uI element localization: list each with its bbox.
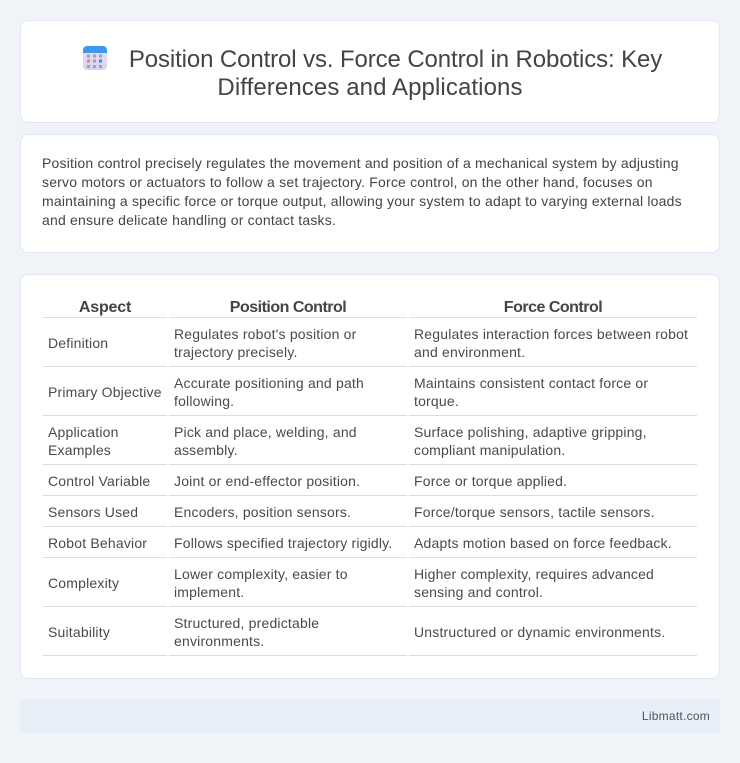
panel: intro text card bbox=[20, 134, 720, 253]
table header row: Aspect bbox=[79, 299, 131, 316]
row: Primary Objective: Accurate positioning and path bbox=[174, 375, 364, 391]
row: Definition: trajectory precisely. bbox=[174, 344, 298, 360]
row: Control Variable: Force or torque applied. bbox=[414, 473, 567, 489]
row: Sensors Used: Force/torque sensors, tactile sensors. bbox=[414, 504, 655, 520]
row: Sensors Used: Encoders, position sensors. bbox=[174, 504, 351, 520]
row: Application Examples bbox=[43, 424, 697, 465]
row: Application Examples: assembly. bbox=[174, 442, 238, 458]
row: Complexity: Complexity bbox=[48, 575, 119, 591]
intro paragraph: Position control precisely regulates the movement and position of a mechanical system by adjusting bbox=[42, 155, 679, 171]
row: Definition: Definition bbox=[48, 335, 108, 351]
row: Control Variable: Joint or end-effector position. bbox=[174, 473, 360, 489]
row: Complexity: Higher complexity, requires advanced bbox=[414, 566, 654, 582]
row: Robot Behavior: Follows specified trajectory rigidly. bbox=[174, 535, 392, 551]
row: Suitability: Structured, predictable bbox=[174, 615, 319, 631]
row: Robot Behavior bbox=[43, 535, 697, 558]
row: Primary Objective: Primary Objective bbox=[48, 384, 162, 400]
row: Suitability bbox=[43, 615, 697, 656]
row: Definition: and environment. bbox=[414, 344, 525, 360]
row: Robot Behavior: Adapts motion based on force feedback. bbox=[414, 535, 672, 551]
table header row: Force Control bbox=[504, 299, 602, 316]
row: Primary Objective: following. bbox=[174, 393, 234, 409]
title: Differences and Applications bbox=[217, 74, 523, 101]
panel: header card bbox=[20, 20, 720, 123]
row: Primary Objective: torque. bbox=[414, 393, 459, 409]
table header row: Position Control bbox=[230, 299, 346, 316]
row: Robot Behavior: Robot Behavior bbox=[48, 535, 147, 551]
row: Suitability: environments. bbox=[174, 633, 264, 649]
row: Application Examples: Application bbox=[48, 424, 119, 440]
row: Sensors Used: Sensors Used bbox=[48, 504, 138, 520]
panel: comparison table card bbox=[20, 274, 720, 679]
table header row bbox=[43, 299, 697, 318]
row: Complexity bbox=[43, 566, 697, 607]
row: Application Examples: Examples bbox=[48, 442, 111, 458]
row: Definition bbox=[43, 326, 697, 367]
row: Application Examples: compliant manipulation. bbox=[414, 442, 565, 458]
row: Primary Objective bbox=[43, 375, 697, 416]
footer bar bbox=[20, 699, 720, 733]
row: Control Variable bbox=[43, 473, 697, 496]
row: Application Examples: Surface polishing, adaptive gripping, bbox=[414, 424, 647, 440]
footer credit: Libmatt.com bbox=[642, 709, 710, 723]
title: Position Control vs. Force Control in Robotics: Key bbox=[129, 46, 662, 73]
intro paragraph: servo motors or actuators to follow a set trajectory. Force control, on the other hand, focuses on bbox=[42, 174, 653, 190]
row: Definition: Regulates robot's position or bbox=[174, 326, 357, 342]
intro paragraph: maintaining a specific force or torque output, allowing your system to adapt to varying external loads bbox=[42, 193, 682, 209]
row: Complexity: implement. bbox=[174, 584, 244, 600]
intro paragraph: and ensure delicate handling or contact tasks. bbox=[42, 212, 336, 228]
row: Control Variable: Control Variable bbox=[48, 473, 150, 489]
icon: calendar grid bbox=[83, 46, 107, 70]
row: Sensors Used bbox=[43, 504, 697, 527]
row: Complexity: Lower complexity, easier to bbox=[174, 566, 348, 582]
row: Definition: Regulates interaction forces between robot bbox=[414, 326, 688, 342]
row: Suitability: Unstructured or dynamic environments. bbox=[414, 624, 665, 640]
intro paragraph bbox=[42, 155, 682, 228]
row: Application Examples: Pick and place, welding, and bbox=[174, 424, 357, 440]
title bbox=[129, 46, 662, 101]
row: Suitability: Suitability bbox=[48, 624, 110, 640]
row: Complexity: sensing and control. bbox=[414, 584, 543, 600]
row: Primary Objective: Maintains consistent contact force or bbox=[414, 375, 648, 391]
